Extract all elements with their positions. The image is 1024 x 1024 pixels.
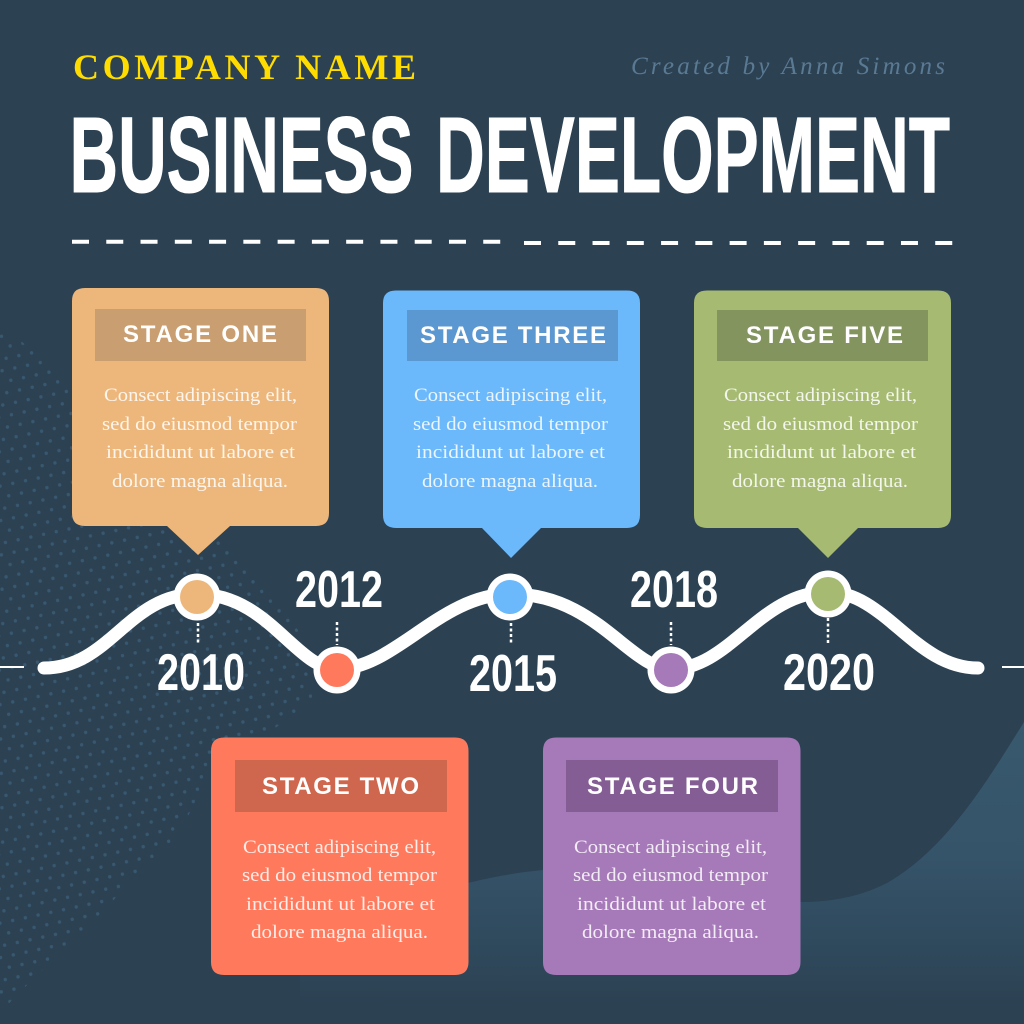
panel: stage five [694, 290, 951, 558]
body text: incididunt ut labore et [727, 442, 917, 463]
marker 2012 [314, 646, 360, 694]
heading: STAGE FIVE [746, 322, 903, 349]
title [70, 94, 950, 215]
body text: Consect adipiscing elit, [574, 837, 767, 858]
author credit: Created by Anna Simons [631, 53, 945, 80]
heading: STAGE FOUR [587, 773, 758, 800]
body text: Consect adipiscing elit, [414, 385, 607, 406]
body text: incididunt ut labore et [246, 894, 436, 915]
body text: incididunt ut labore et [577, 894, 767, 915]
heading: STAGE ONE [123, 321, 277, 348]
body text: sed do eiusmod tempor [723, 414, 919, 435]
body text: Consect adipiscing elit, [104, 385, 297, 406]
body text: sed do eiusmod tempor [102, 414, 298, 435]
body text: incididunt ut labore et [106, 442, 296, 463]
body text: sed do eiusmod tempor [413, 414, 609, 435]
heading: STAGE TWO [262, 773, 419, 800]
year 2015: 2015 [469, 645, 557, 703]
title: BUSINESS [70, 94, 414, 215]
body text: incididunt ut labore et [416, 442, 606, 463]
marker 2020 [804, 570, 852, 618]
body text [413, 385, 609, 492]
connectors [198, 618, 828, 645]
year 2018: 2018 [630, 561, 718, 619]
body text: dolore magna aliqua. [112, 471, 288, 492]
company name: COMPANY NAME [73, 47, 416, 87]
body text: Consect adipiscing elit, [724, 385, 917, 406]
body text [723, 385, 919, 492]
panel: stage three [383, 290, 640, 558]
panel: stage two [211, 738, 468, 975]
year 2012: 2012 [295, 561, 383, 619]
year 2010: 2010 [157, 644, 245, 702]
marker 2010 [174, 574, 220, 620]
marker 2018 [648, 646, 694, 694]
body text: Consect adipiscing elit, [243, 837, 436, 858]
body text: sed do eiusmod tempor [573, 865, 769, 886]
background: dotted blob [0, 326, 313, 1013]
year 2020: 2020 [783, 644, 875, 702]
timeline [0, 561, 1024, 703]
marker 2015 [486, 574, 534, 620]
panel: stage four [543, 738, 800, 975]
body text [573, 837, 769, 943]
body text: dolore magna aliqua. [422, 471, 598, 492]
heading: STAGE THREE [420, 322, 606, 349]
panel: stage one [72, 288, 329, 555]
body text: sed do eiusmod tempor [242, 865, 438, 886]
timeline curve [44, 592, 978, 669]
body text [102, 385, 298, 492]
body text [242, 837, 438, 943]
body text: dolore magna aliqua. [251, 922, 428, 943]
background: lighter wave [300, 722, 1024, 1024]
body text: dolore magna aliqua. [582, 922, 759, 943]
body text: dolore magna aliqua. [732, 471, 908, 492]
